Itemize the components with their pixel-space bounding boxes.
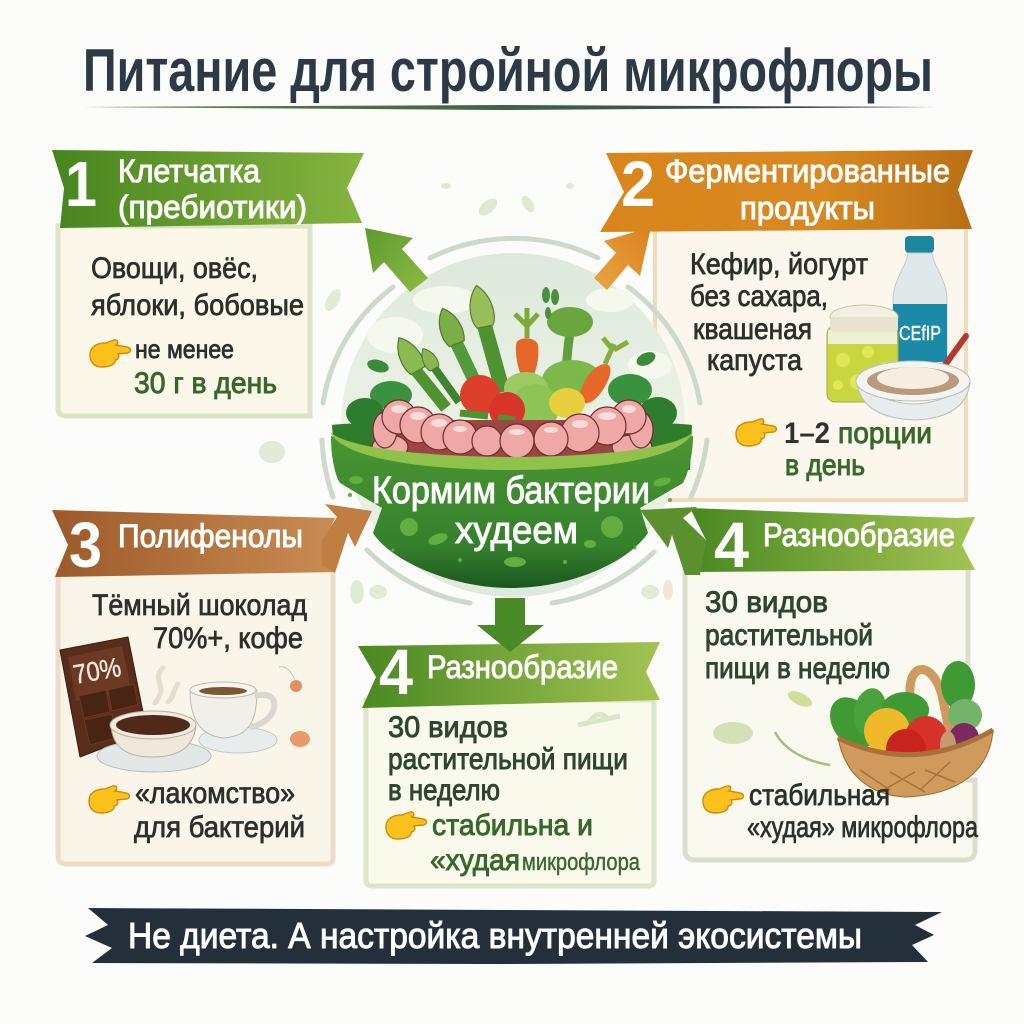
panel 3 banner (52, 510, 335, 577)
vegetables (346, 283, 677, 432)
lettuce (566, 322, 572, 372)
panel 3 body text: Тёмный шоколад (92, 589, 307, 622)
panel 1 body text: яблоки, бобовые (91, 289, 304, 322)
panel 2 heading: продукты (740, 190, 875, 226)
bowl label: Кормим бактерии (372, 470, 650, 512)
bowl rim (330, 432, 693, 470)
icon: pointing hand (736, 419, 776, 446)
bowl speckles (348, 476, 672, 567)
panel 3 note: «лакомство» (135, 777, 295, 810)
icon: pointing hand (386, 812, 426, 839)
panel 4: variety (centre) (358, 636, 660, 886)
panel 1 number: 1 (65, 148, 97, 220)
centre panel note: микрофлора (522, 849, 641, 876)
panel 1 note: не менее (135, 334, 234, 364)
bowl interior (332, 421, 692, 470)
icon: kefir bottle: CEfIP (899, 323, 941, 345)
intestine (372, 400, 653, 460)
panel 4: variety (right) (685, 508, 993, 860)
arrow from right panel (640, 507, 706, 575)
right panel card (685, 565, 975, 860)
panel 2 heading (665, 153, 950, 226)
right panel heading: Разнообразие (763, 517, 955, 553)
panel 3: polyphenols (52, 509, 335, 864)
right panel note (747, 779, 978, 844)
panel 2 body text: квашеная (693, 313, 812, 346)
panel 1 heading: Клетчатка (118, 153, 260, 189)
panel 2 number: 2 (621, 148, 655, 220)
cabbage and tomatoes (504, 372, 548, 404)
panel 3 number: 3 (69, 509, 102, 581)
icon: cherries (279, 667, 310, 747)
bottom banner (85, 908, 942, 964)
centre panel card (366, 700, 654, 886)
banner shape (85, 908, 942, 964)
arrow down to centre panel (477, 598, 544, 652)
banner text: Не диета. А настройка внутренней экосистемы (128, 915, 862, 956)
icon: vegetable basket (821, 661, 993, 797)
panel 1 banner (52, 150, 364, 228)
centre panel note: стабильна и (432, 809, 593, 842)
right panel banner (690, 508, 975, 572)
panel 1 body text: Овощи, овёс, (91, 252, 258, 285)
segmented ring (322, 238, 707, 603)
panel 1 note: 30 г в день (134, 367, 277, 400)
right panel note: стабильная (749, 779, 890, 812)
panel 2: fermented (600, 148, 973, 500)
panel 2 note (784, 417, 932, 482)
centre panel body text (388, 711, 628, 807)
panel 2 body text: без сахара, (690, 280, 828, 313)
centre panel note: «худая (430, 844, 520, 877)
panel 1 heading (118, 153, 307, 225)
right panel body text: растительной (705, 619, 873, 652)
right panel body text: пищи в неделю (705, 652, 890, 685)
panel 2 heading: Ферментированные (665, 153, 950, 189)
icon: chocolate bar: 70% (71, 652, 123, 690)
icon: pointing hand (703, 786, 743, 813)
panel 3 card (58, 570, 333, 864)
panel 3 note: для бактерий (134, 811, 305, 844)
centre panel note (430, 809, 641, 877)
panel 2 banner (600, 150, 973, 232)
bowl label: худеем (455, 510, 578, 552)
panel 1 body text (91, 252, 304, 322)
asparagus (414, 320, 503, 408)
intestine highlights (391, 405, 636, 435)
arrow to panel 2 (594, 227, 651, 290)
central illustration (322, 238, 707, 603)
clouds in the halo (367, 286, 672, 379)
icon: pointing hand (89, 786, 129, 813)
halo circle (341, 253, 685, 597)
icon: chocolate bar (60, 637, 150, 757)
title underline (83, 105, 936, 110)
panel 2 note: порции (838, 417, 932, 450)
icon: coffee cup on saucer (190, 682, 277, 753)
bowl label (372, 470, 650, 552)
panel 2 body text (690, 248, 868, 377)
centre panel heading: Разнообразие (427, 649, 618, 685)
centre panel body text: 30 видов (388, 711, 508, 744)
arrow to panel 1 (365, 228, 428, 292)
centre panel body text: растительной пищи (388, 743, 628, 776)
icon: chocolate drink on saucer (97, 711, 211, 772)
right panel body text (705, 586, 890, 685)
decorative leaves (259, 183, 673, 604)
panel 1: fibre (52, 148, 364, 416)
panel 2 note: 1–2 (784, 417, 830, 450)
panel 3 body text (92, 589, 307, 655)
panel 3 note (134, 777, 305, 844)
panel 1 heading: (пребиотики) (118, 189, 307, 225)
panel 3 body text: 70%+, кофе (153, 622, 303, 655)
icon: jar of sauerkraut (827, 305, 898, 402)
arrow from panel 3 (322, 504, 372, 573)
decorative sprig (578, 714, 620, 725)
panel 2 card (655, 226, 966, 500)
icon: pointing hand (90, 340, 130, 367)
panel 3 heading: Полифенолы (118, 518, 303, 554)
icon: steam (155, 668, 178, 703)
panel 2 body text: капуста (707, 344, 802, 377)
centre panel number: 4 (379, 636, 413, 708)
right panel body text: 30 видов (705, 586, 828, 619)
centre panel banner (358, 642, 660, 708)
panel 1 card (58, 226, 310, 416)
centre panel body text: в неделю (388, 774, 500, 807)
bowl body (331, 436, 693, 588)
carrots (516, 338, 538, 385)
icon: kefir bottle (893, 236, 947, 375)
greens behind (346, 374, 677, 429)
panel 2 body text: Кефир, йогурт (690, 248, 868, 281)
right panel number: 4 (714, 509, 749, 581)
panel 2 note: в день (785, 449, 865, 482)
decorative sprigs (713, 688, 830, 765)
icon: yoghurt bowl with spoon (856, 336, 970, 420)
panel 1 note (134, 334, 277, 400)
